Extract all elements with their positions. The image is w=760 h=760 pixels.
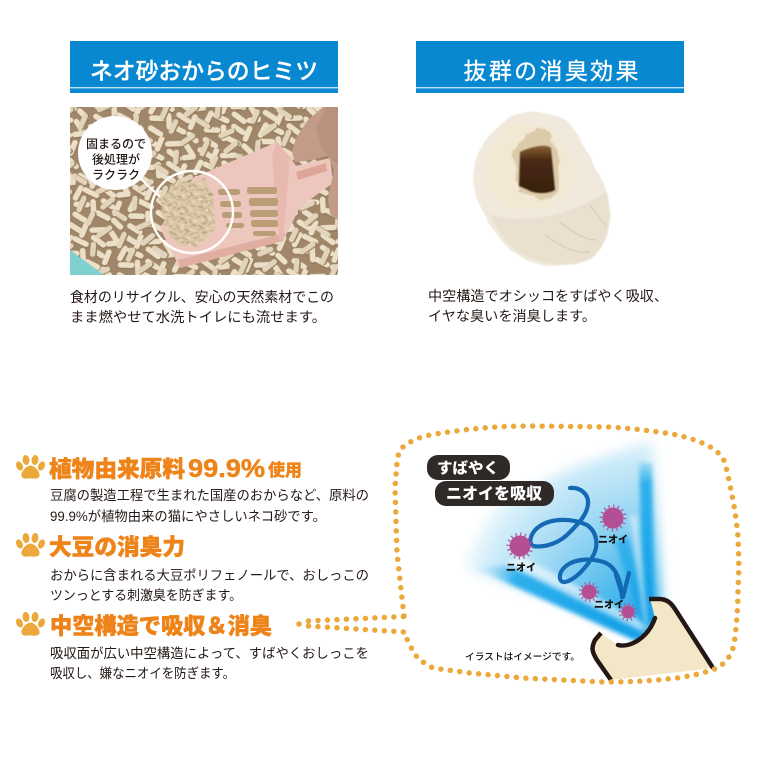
label pill: すばやく ニオイを吸収: すばやく <box>437 459 499 477</box>
feature 3: 中空構造で吸収&消臭: 中空構造で吸収＆消臭 <box>50 614 272 639</box>
feature 3: 中空構造で吸収&消臭: 吸収面が広い中空構造によって、すばやくおしっこを <box>50 646 369 661</box>
icon: paw <box>15 612 46 636</box>
feature 1: 植物由来原料: 使用 <box>268 460 302 480</box>
odor particle <box>620 604 636 620</box>
feature 2: 大豆の消臭力: 大豆の消臭力 <box>49 535 185 560</box>
text: left caption: まま燃やせて水洗トイレにも流せます。 <box>70 309 326 325</box>
orange dotted outline <box>395 426 739 682</box>
hand holding scoop <box>292 107 338 220</box>
feature 1: 植物由来原料: 植物由来原料 <box>49 457 185 482</box>
callout bubble <box>78 116 152 190</box>
feature 2: 大豆の消臭力: おからに含まれる大豆ポリフェノールで、おしっこの <box>50 568 369 583</box>
fibrous side streaks <box>545 205 606 252</box>
odor particle: ニオイ <box>594 599 624 611</box>
odor particle <box>598 506 628 546</box>
feature 2: 大豆の消臭力: ツンっとする刺激臭を防ぎます。 <box>50 588 242 603</box>
feature 3: 中空構造で吸収&消臭 <box>15 612 369 681</box>
icon: paw <box>15 455 46 479</box>
clumped litter <box>160 180 217 245</box>
photo: scoop lifting clumped litter <box>70 107 338 275</box>
swirl arrow <box>530 488 629 597</box>
odor particle <box>580 583 624 611</box>
label pill: すばやく ニオイを吸収 <box>427 455 554 506</box>
text: right caption: 中空構造でオシッコをすばやく吸収、 <box>428 288 668 304</box>
feature 1: 植物由来原料 <box>15 455 369 524</box>
teal tray corner <box>70 250 104 275</box>
feature 2: 大豆の消臭力 <box>15 533 369 603</box>
text: left caption <box>70 289 334 325</box>
odor particle: ニオイ <box>506 562 536 574</box>
text: left caption: 食材のリサイクル、安心の天然素材でこの <box>70 289 334 305</box>
feature 1: 植物由来原料: 豆腐の製造工程で生まれた国産のおからなど、原料の <box>50 488 369 503</box>
label pill: すばやく ニオイを吸収: ニオイを吸収 <box>446 485 542 503</box>
odor particle: ニオイ <box>598 534 628 546</box>
banner: ネオ砂おからのヒミツ: ネオ砂おからのヒミツ <box>90 58 318 84</box>
dotted connector to heading <box>296 616 404 632</box>
banner: 抜群の消臭効果 <box>416 41 684 93</box>
text: right caption: イヤな臭いを消臭します。 <box>428 308 596 324</box>
pink scoop <box>160 142 333 268</box>
note: イラストはイメージです。 <box>465 652 580 663</box>
magnifier ring <box>151 171 233 253</box>
feature 3: 中空構造で吸収&消臭: 吸収し、嫌なニオイを防ぎます。 <box>50 666 235 681</box>
text: right caption <box>428 288 668 324</box>
cream tray corner <box>312 107 323 112</box>
callout leader line <box>141 179 160 197</box>
photo: hollow okara pellet <box>473 112 610 266</box>
feature 1: 植物由来原料: 99.9%が植物由来の猫にやさしいネコ砂です。 <box>50 508 326 524</box>
odor particle <box>506 534 536 574</box>
cartridge cross-section <box>592 598 713 680</box>
pellet hollow <box>519 146 555 193</box>
diagram: absorption illustration <box>296 426 739 682</box>
callout bubble: ラクラク <box>92 168 140 182</box>
banner: 抜群の消臭効果: 抜群の消臭効果 <box>464 58 638 84</box>
callout bubble: 固まるので <box>86 137 146 151</box>
feature 1: 植物由来原料: 99.9% <box>188 455 265 483</box>
icon: paw <box>15 533 46 557</box>
absorption light fan <box>461 440 662 643</box>
banner: ネオ砂おからのヒミツ <box>70 41 338 93</box>
callout bubble: 後処理が <box>92 152 140 166</box>
